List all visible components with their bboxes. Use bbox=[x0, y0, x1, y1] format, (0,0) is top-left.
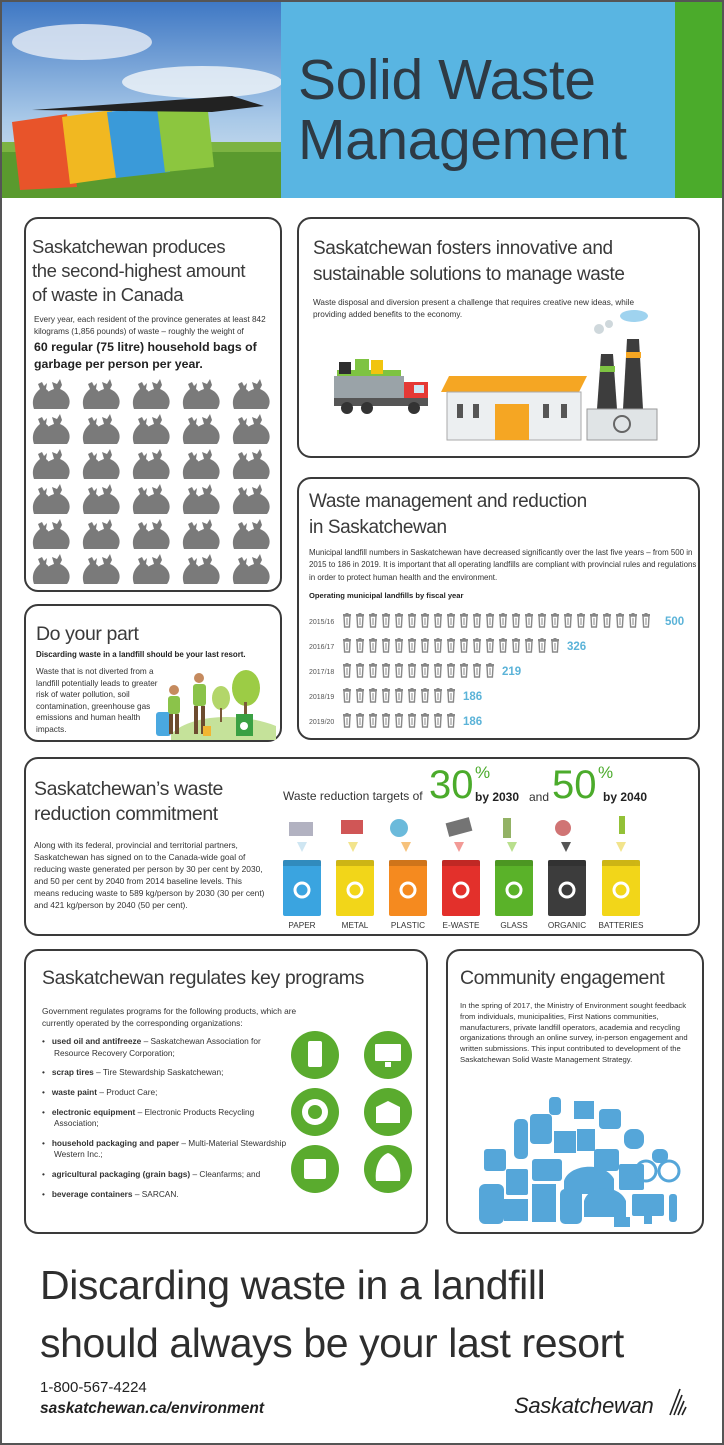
logo: Saskatchewan bbox=[514, 1388, 687, 1418]
panel: innovative solutions bbox=[297, 217, 700, 458]
targets headline bbox=[283, 763, 647, 807]
targets headline: by 2040 bbox=[603, 790, 647, 804]
closing statement: Discarding waste in a landfill bbox=[40, 1262, 545, 1308]
text block: program list: • agricultural packaging (grain bags) – Cleanfarms; and bbox=[42, 1169, 260, 1179]
title: Solid Waste bbox=[298, 48, 596, 112]
heading: Saskatchewan regulates key programs bbox=[42, 967, 364, 989]
targets headline: % bbox=[475, 763, 490, 782]
heading: Waste management and reduction bbox=[309, 491, 587, 512]
text block: Municipal landfill numbers in Saskatchewan have decreased significantly over the last five years – from 500 in 2015 to 186 in 2019. It is important that all operating landfills are compliant with provincial rules and regulations in order to protect human health and the environment. bbox=[309, 548, 696, 582]
blue title band bbox=[281, 2, 675, 198]
targets headline: % bbox=[598, 763, 613, 782]
text block: program list: • beverage containers – SARCAN. bbox=[42, 1189, 179, 1199]
illustration: volunteers recycling bbox=[156, 670, 276, 740]
chart: recycling bins by category: PAPER bbox=[288, 921, 316, 930]
text block bbox=[34, 315, 266, 371]
targets headline: Waste reduction targets of bbox=[283, 789, 423, 803]
title bbox=[298, 48, 627, 172]
text block: In the spring of 2017, the Ministry of Environment sought feedback from individuals, municipalities, First Nations communities, manufacturers, private landfill operators, academia and recycling organizations through an online survey, in-person engagement and written submissions. This input contributed to development of the Saskatchewan Solid Waste Management Strategy. bbox=[460, 1001, 688, 1064]
panel: second-highest amount bbox=[24, 217, 282, 592]
title: Management bbox=[298, 108, 627, 172]
chart: landfill pictogram rows: 2019/20 bbox=[309, 719, 334, 726]
text block: Waste that is not diverted from a landfill potentially leads to greater risk of water pollution, soil contamination, greenhouse gas emissions and human health impacts. bbox=[36, 667, 158, 734]
heading: reduction commitment bbox=[34, 803, 218, 825]
text block: program list: • household packaging and paper – Multi-Material Stewardship Western Inc.; bbox=[42, 1138, 286, 1159]
heading bbox=[309, 491, 587, 538]
chart: recycling bins by category bbox=[283, 816, 644, 930]
heading: Saskatchewan’s waste bbox=[34, 778, 223, 800]
targets headline: and bbox=[529, 790, 549, 804]
panel: regulates key programs bbox=[24, 949, 428, 1234]
chart: landfill pictogram rows: 186 bbox=[463, 716, 482, 728]
icons: program categories bbox=[291, 1031, 412, 1193]
text block: Along with its federal, provincial and territorial partners, Saskatchewan has signed on to the Canada-wide goal of reducing waste generated per person by 30 per cent by 2030, and 50 per cent by 2040 from 2014 baseline levels. This means reducing waste to 589 kg/person by 2030 (30 per cent) and 421 kg/person by 2040 (50 per cent). bbox=[34, 840, 264, 910]
contact: phone and website: saskatchewan.ca/environment bbox=[40, 1400, 264, 1417]
heading: Saskatchewan produces bbox=[32, 236, 225, 257]
heading: Do your part bbox=[36, 623, 138, 645]
closing statement bbox=[40, 1262, 624, 1366]
chart: landfill pictogram rows: 2017/18 bbox=[309, 669, 334, 676]
chart: recycling bins by category: GLASS bbox=[500, 921, 528, 930]
text block: program list: Government regulates programs for the following products, which are currently operated by the corresponding organizations: bbox=[42, 1006, 296, 1028]
heading bbox=[32, 236, 246, 305]
chart: recycling bins by category: METAL bbox=[342, 921, 369, 930]
logo: Saskatchewan: Saskatchewan bbox=[514, 1393, 654, 1418]
chart: recycling bins by category: BATTERIES bbox=[599, 921, 644, 930]
chart: landfill pictogram rows: 186 bbox=[463, 691, 482, 703]
heading: Saskatchewan fosters innovative and bbox=[313, 238, 613, 259]
panel: waste management and reduction bbox=[297, 477, 700, 740]
subheading: Discarding waste in a landfill should be your last resort. bbox=[36, 650, 246, 659]
header bbox=[2, 2, 722, 198]
header photo: skip bins bbox=[2, 2, 281, 198]
contact: phone and website: 1-800-567-4224 bbox=[40, 1379, 147, 1396]
text block: program list: • waste paint – Product Care; bbox=[42, 1087, 157, 1097]
illustration: pile of waste items bbox=[479, 1097, 680, 1227]
text block: program list: • scrap tires – Tire Stewardship Saskatchewan; bbox=[42, 1067, 223, 1077]
chart: garbage bags grid bbox=[32, 379, 270, 584]
chart: landfill pictogram rows: 219 bbox=[502, 666, 521, 678]
contact: phone and website bbox=[40, 1379, 265, 1417]
chart: landfill pictogram rows: 2018/19 bbox=[309, 694, 334, 701]
chart: landfill pictogram rows: 2016/17 bbox=[309, 644, 334, 651]
chart: landfill pictogram rows bbox=[309, 613, 684, 728]
text block: 60 regular (75 litre) household bags of garbage per person per year. bbox=[34, 340, 257, 371]
chart: landfill pictogram rows: 500 bbox=[665, 616, 684, 628]
text block: Every year, each resident of the province generates at least 842 kilograms (1,856 pounds) of waste – roughly the weight of bbox=[34, 315, 266, 336]
chart: recycling bins by category: ORGANIC bbox=[548, 921, 586, 930]
panel: reduction commitment bbox=[24, 757, 700, 936]
heading bbox=[313, 238, 625, 285]
illustration: truck, facility, chimneys bbox=[334, 310, 658, 440]
panel: community engagement bbox=[446, 949, 704, 1234]
targets headline: by 2030 bbox=[475, 790, 519, 804]
panel: do your part bbox=[24, 604, 282, 742]
heading: in Saskatchewan bbox=[309, 517, 447, 538]
heading: of waste in Canada bbox=[32, 284, 183, 305]
chart title: Operating municipal landfills by fiscal year bbox=[309, 591, 463, 600]
text block: program list: • used oil and antifreeze – Saskatchewan Association for Resource Recovery Corporation; bbox=[42, 1036, 261, 1058]
targets headline: 50 bbox=[552, 763, 596, 807]
closing statement: should always be your last resort bbox=[40, 1320, 624, 1366]
chart: recycling bins by category: PLASTIC bbox=[391, 921, 425, 930]
chart: recycling bins by category: E-WASTE bbox=[442, 921, 480, 930]
heading: Community engagement bbox=[460, 967, 664, 989]
chart: landfill pictogram rows: 2015/16 bbox=[309, 619, 334, 626]
targets headline: 30 bbox=[429, 763, 474, 807]
heading: the second-highest amount bbox=[32, 260, 245, 281]
text block: Waste disposal and diversion present a challenge that requires creative new ideas, while providing added benefits to the economy. bbox=[313, 298, 634, 319]
chart: landfill pictogram rows: 326 bbox=[567, 641, 586, 653]
text block: program list bbox=[42, 1006, 296, 1199]
heading bbox=[34, 778, 223, 825]
text block: program list: • electronic equipment – Electronic Products Recycling Association; bbox=[42, 1107, 254, 1128]
green stripe bbox=[675, 2, 722, 198]
heading: sustainable solutions to manage waste bbox=[313, 264, 625, 285]
